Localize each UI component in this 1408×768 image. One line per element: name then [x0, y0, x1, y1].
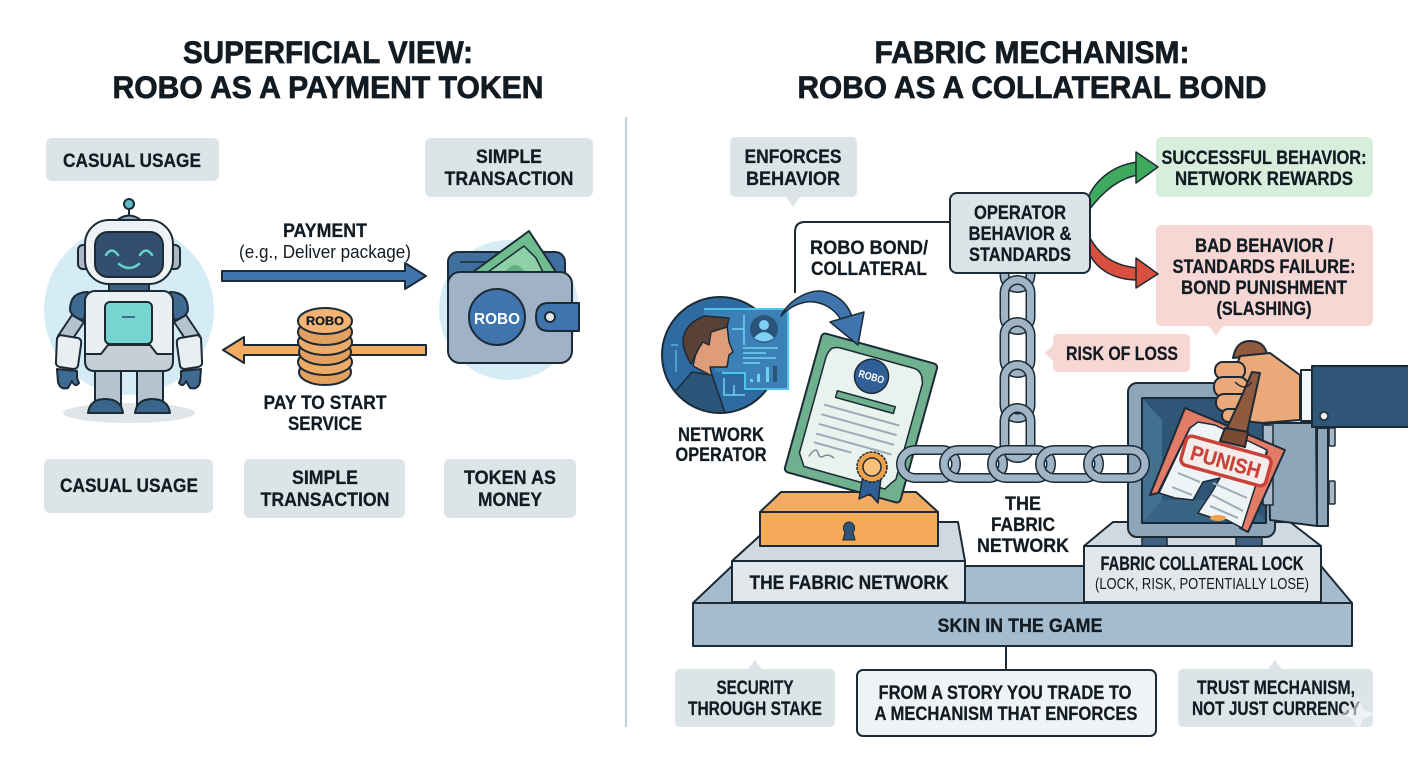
label: robo bond collateral: ROBO BOND/ — [810, 237, 929, 259]
callout: security through stake: SECURITY — [716, 677, 794, 699]
icon: wallet — [439, 231, 579, 380]
label: pay to start service: PAY TO START — [264, 392, 387, 414]
callout: risk of loss — [1045, 334, 1190, 372]
label: the fabric network center: NETWORK — [977, 535, 1069, 557]
label: robo bond collateral — [810, 237, 929, 280]
platform: fabric collateral lock: (LOCK, RISK, POTENTIALLY LOSE) — [1095, 576, 1309, 593]
title: superficial view: SUPERFICIAL VIEW: — [183, 34, 473, 70]
panel: superficial view — [44, 138, 593, 518]
icon: punished document — [1150, 408, 1285, 532]
label: network operator: OPERATOR — [676, 444, 766, 466]
callout: trust mechanism: TRUST MECHANISM, — [1197, 677, 1355, 699]
payment label — [239, 220, 411, 262]
callout: trust mechanism — [1178, 660, 1373, 727]
callout: bad behavior: BOND PUNISHMENT — [1181, 277, 1347, 299]
icon: open safe — [1128, 383, 1335, 546]
arrow: failure red — [1089, 238, 1158, 288]
icon: suit sleeve — [1301, 366, 1408, 427]
icon: bond certificate — [784, 333, 938, 503]
arrow: operator to certificate — [781, 291, 864, 345]
label: casual usage bottom — [44, 459, 213, 513]
label: casual usage top — [46, 138, 219, 181]
arrow: success green — [1086, 152, 1158, 210]
label: the fabric network center — [977, 493, 1069, 557]
central divider — [625, 117, 627, 727]
icon: punished document: PUNISH — [1188, 442, 1263, 483]
icon: bond certificate: ROBO — [857, 368, 885, 387]
platform: skin in the game base — [693, 566, 1352, 646]
label: token as money: MONEY — [478, 489, 542, 511]
label: simple transaction top: SIMPLE — [476, 146, 542, 168]
box: operator behavior and standards: BEHAVIOR & — [968, 223, 1072, 245]
title: superficial view — [112, 34, 544, 105]
icon: certificate seal — [857, 452, 887, 503]
platform: the fabric network: THE FABRIC NETWORK — [750, 572, 948, 594]
callout: bad behavior: BAD BEHAVIOR / — [1195, 235, 1333, 257]
callout: enforces behavior: BEHAVIOR — [746, 168, 840, 190]
label: token as money: TOKEN AS — [464, 467, 556, 489]
title: superficial view: ROBO AS A PAYMENT TOKEN — [112, 69, 544, 105]
robot right arm — [170, 292, 202, 388]
arrow: pay back from wallet — [223, 337, 426, 363]
label: network operator: NETWORK — [678, 424, 764, 446]
label: robo bond collateral: COLLATERAL — [811, 258, 927, 280]
connector: base to center message — [1005, 646, 1007, 670]
callout: bad behavior — [1156, 225, 1373, 336]
callout: bad behavior: (SLASHING) — [1216, 298, 1312, 320]
label: simple transaction bottom: TRANSACTION — [260, 489, 390, 511]
box: from a story to a mechanism: FROM A STORY YOU TRADE TO — [878, 682, 1132, 704]
label: casual usage top: CASUAL USAGE — [63, 150, 201, 172]
label: pay to start service: SERVICE — [288, 413, 362, 435]
box: operator behavior and standards: OPERATOR — [974, 202, 1066, 224]
platform: fabric collateral lock — [1084, 522, 1321, 602]
callout: enforces behavior — [730, 137, 857, 207]
label: token as money — [444, 459, 576, 518]
arrow: payment to wallet — [222, 263, 426, 289]
icon: horizontal chain — [901, 450, 1145, 478]
title: fabric mechanism: FABRIC MECHANISM: — [874, 34, 1190, 70]
callout: security through stake — [675, 660, 835, 727]
label: network operator — [676, 424, 766, 466]
icon: network operator portrait — [662, 297, 788, 416]
platform: the fabric network — [732, 522, 965, 602]
label: simple transaction top: TRANSACTION — [444, 168, 574, 190]
platform: skin in the game base: SKIN IN THE GAME — [938, 615, 1102, 637]
box: operator behavior and standards — [950, 193, 1090, 273]
callout: successful behavior: SUCCESSFUL BEHAVIOR: — [1162, 147, 1366, 169]
icon: orange lock box — [760, 492, 938, 546]
label: simple transaction top — [425, 138, 593, 197]
label: the fabric network center: FABRIC — [991, 514, 1055, 536]
payment label: PAYMENT — [283, 220, 367, 242]
callout: trust mechanism: NOT JUST CURRENCY — [1192, 698, 1360, 720]
icon: robot — [44, 199, 214, 423]
title: fabric mechanism: ROBO AS A COLLATERAL BOND — [798, 69, 1266, 105]
box: from a story to a mechanism — [857, 670, 1156, 736]
panel: fabric mechanism — [662, 137, 1408, 736]
icon: coin stack: ROBO — [306, 316, 344, 328]
label: casual usage bottom: CASUAL USAGE — [60, 475, 198, 497]
callout: security through stake: THROUGH STAKE — [688, 698, 822, 720]
callout: risk of loss: RISK OF LOSS — [1066, 343, 1178, 365]
label: simple transaction bottom — [244, 459, 405, 518]
platform: fabric collateral lock: FABRIC COLLATERAL LOCK — [1100, 553, 1304, 575]
title: fabric mechanism — [798, 34, 1266, 105]
box: from a story to a mechanism: A MECHANISM THAT ENFORCES — [874, 703, 1138, 725]
box: operator behavior and standards: STANDARDS — [969, 244, 1071, 266]
connector: bond to operator box — [795, 222, 950, 293]
label: the fabric network center: THE — [1005, 493, 1041, 515]
icon: coin stack — [298, 308, 352, 385]
callout: successful behavior — [1156, 137, 1373, 197]
callout: successful behavior: NETWORK REWARDS — [1175, 168, 1353, 190]
icon: vertical chain — [1004, 260, 1030, 458]
label: simple transaction bottom: SIMPLE — [292, 467, 358, 489]
robot left arm — [56, 292, 88, 388]
callout: enforces behavior: ENFORCES — [744, 146, 842, 168]
icon: hand and stamp — [1214, 341, 1300, 447]
payment label: (e.g., Deliver package) — [239, 242, 411, 262]
callout: bad behavior: STANDARDS FAILURE: — [1172, 256, 1356, 278]
icon: wallet: ROBO — [474, 311, 520, 328]
label: pay to start service — [264, 392, 387, 435]
